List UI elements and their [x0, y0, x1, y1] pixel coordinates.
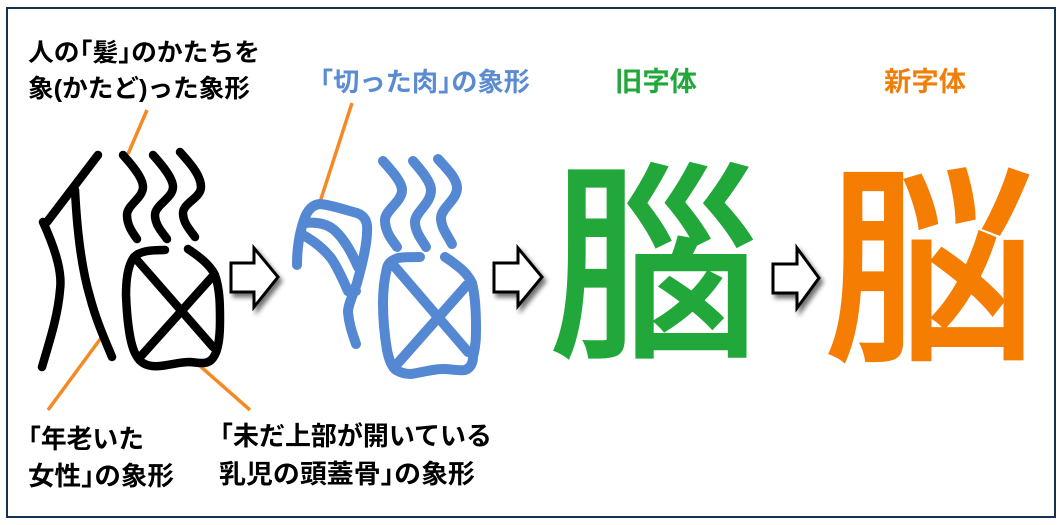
caption: infant skull: 「未だ上部が開いている — [220, 421, 492, 451]
arrow 2 — [494, 248, 542, 306]
arrow 1 — [231, 248, 278, 307]
leader lines — [48, 103, 352, 410]
ancient glyph: blue — [297, 159, 476, 374]
caption: infant skull — [219, 421, 492, 489]
heading: old form: 旧字体 — [615, 67, 697, 97]
heading: new form: 新字体 — [884, 67, 966, 97]
caption: infant skull: 乳児の頭蓋骨」の象形 — [219, 459, 475, 489]
old form character: 腦 — [549, 97, 759, 401]
heading: hair caption: 象(かたど)った象形 — [28, 75, 250, 103]
arrow 3 — [773, 248, 819, 308]
ancient glyph: black — [42, 152, 220, 367]
new form character: 脳 — [825, 100, 1035, 404]
caption: elderly woman: 「年老いた — [28, 424, 144, 454]
heading: meat caption: 「切った肉」の象形 — [320, 67, 530, 97]
heading: hair caption: 人の「髪」のかたちを — [28, 39, 260, 67]
caption: elderly woman: 女性」の象形 — [28, 461, 174, 491]
caption: elderly woman — [28, 424, 174, 491]
heading: hair caption — [28, 39, 260, 103]
